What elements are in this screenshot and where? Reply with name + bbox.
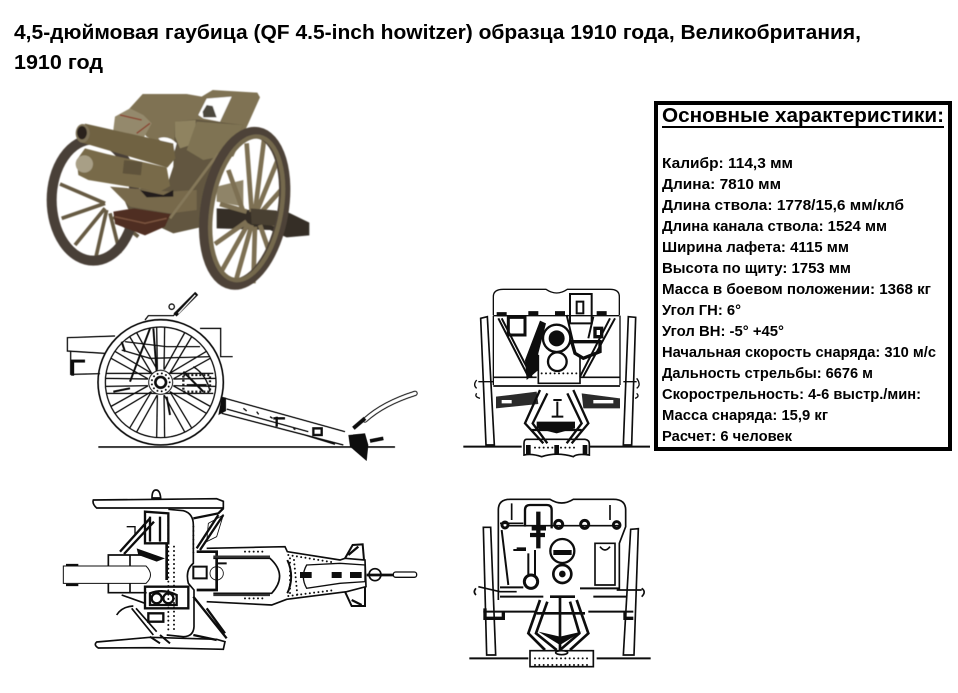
axle [483,587,633,612]
white details [502,397,613,407]
right wheel [623,529,638,655]
spec list: Масса в боевом положении: 1368 кг [662,282,931,298]
photo: howitzer [52,90,309,290]
spec list: Высота по щиту: 1753 мм [662,261,851,277]
right mechanism [572,328,602,358]
machinery behind wheel [107,293,233,415]
elevating column [530,512,546,548]
muzzle fitting [71,360,85,376]
panel heading: Основные характеристики: [662,105,944,127]
side plate [595,543,615,585]
rivets [168,517,193,633]
spec list: Дальность стрельбы: 6676 м [662,366,873,382]
ground line [463,444,650,450]
shield rivets [497,307,607,321]
shield outline [498,499,626,600]
spec list: Начальная скорость снаряда: 310 м/с [662,345,936,361]
axle [493,377,620,386]
spec list: Скорострельность: 4-6 выстр./мин: [662,387,921,403]
sight [203,105,217,117]
spec list: Угол ГН: 6° [662,303,741,319]
right wheel hub [251,208,282,226]
right wheel spokes [215,140,284,287]
spec list: Ширина лафета: 4115 мм [662,240,849,256]
spec list: Длина ствола: 1778/15,6 мм/клб [662,198,904,214]
elevating gear [525,321,546,380]
trail handle [353,393,415,441]
left gear [502,530,538,588]
left wheel [483,527,496,655]
rear view drawing [469,499,651,667]
upper wheel [93,490,223,508]
barrel [67,336,115,353]
recoil block [108,555,148,603]
spade wings [345,544,365,606]
ground line [469,655,651,661]
spec list: Длина: 7810 мм [662,177,781,193]
trail arms [528,597,588,650]
canvas pack [113,108,152,138]
breech machinery [110,187,197,213]
shield opening [198,97,232,122]
title: 4,5-дюймовая гаубица (QF 4.5-inch howitzer) образца 1910 года, Великобритания, [14,22,861,44]
lower wheel [95,637,225,649]
spec list: Длина канала ствола: 1524 мм [662,219,887,235]
trail [207,547,366,605]
trail [218,397,345,445]
left box [508,317,525,335]
tail of the carriage [217,208,309,237]
shield outline [493,289,620,385]
cradle [538,352,580,383]
breech [550,539,574,583]
centre fittings [167,543,227,590]
title: 1910 год [14,52,103,74]
ground line [98,444,395,449]
trail head [524,439,589,457]
muzzle [76,124,90,143]
upper rail [500,503,620,526]
diagonal strut [170,153,218,218]
barrel [80,124,175,168]
left wheel rim [52,139,135,261]
barrel [543,325,570,352]
lower mechanism [117,587,227,643]
right wheel [623,317,636,445]
wheel [98,320,223,445]
barrel [63,566,150,583]
ammunition box [113,208,171,235]
right wheel rim [194,126,296,290]
panel frame [656,103,950,449]
axle clamps [485,608,633,618]
hubs [475,378,639,398]
hubs [474,587,644,597]
left wheel spokes [60,184,138,258]
trail head [530,651,593,667]
spec list: Масса снаряда: 15,9 кг [662,408,828,424]
spec list: Угол ВН: -5° +45° [662,324,784,340]
shield [127,90,260,157]
spec list: Калибр: 114,3 мм [662,156,793,172]
spec list [662,156,936,445]
top view drawing [63,490,417,649]
handle frame [525,505,552,528]
panel: main characteristics [656,103,950,449]
left wheel [481,317,494,445]
shield [167,509,194,637]
trail arms [525,390,588,443]
upper mechanism [120,508,223,562]
recuperator [77,148,170,192]
side view drawing [67,293,415,461]
carriage body [120,119,243,233]
spade [348,433,368,461]
shield fittings [502,520,620,528]
lower band [496,392,620,408]
handle [367,569,417,581]
front view drawing [463,289,650,457]
title [14,22,861,74]
spec list: Расчет: 6 человек [662,429,793,445]
shield braces [498,315,615,377]
sight box [570,294,592,323]
